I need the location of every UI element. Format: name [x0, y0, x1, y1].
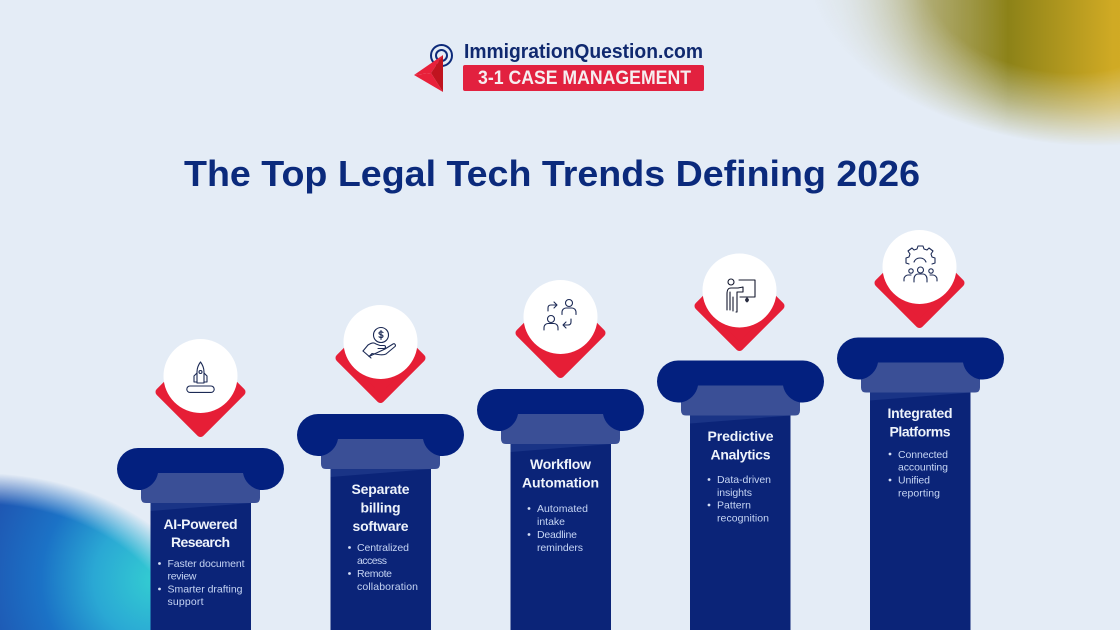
bullet list: access — [357, 555, 387, 567]
bullet list: Unified — [898, 474, 930, 486]
bullet list: Pattern — [717, 500, 751, 512]
bullet list: reminders — [537, 542, 583, 554]
bullet list — [889, 449, 948, 500]
bullet list: review — [168, 570, 197, 582]
icon circle — [164, 339, 238, 413]
pillar 4: Predictive Analytics — [657, 254, 824, 630]
heading — [522, 456, 599, 490]
decorative gold glow top right — [836, 0, 1120, 144]
bullet list: recognition — [717, 512, 769, 524]
heading: software — [352, 518, 409, 534]
bullet list: Connected — [898, 449, 948, 461]
heading: Predictive — [708, 428, 774, 444]
heading — [888, 405, 952, 440]
heading: Automation — [522, 474, 599, 490]
column shaft — [510, 444, 611, 630]
decorative blue glow bottom left — [0, 475, 150, 630]
icon: gear and team — [904, 246, 937, 282]
column capital — [477, 389, 644, 444]
column shaft — [150, 503, 251, 630]
icon: people exchange — [544, 300, 576, 330]
heading — [708, 428, 774, 462]
heading: AI-Powered — [164, 516, 238, 532]
heading: Platforms — [890, 424, 951, 440]
bullet list: collaboration — [357, 581, 418, 593]
logo banner: 3-1 CASE MANAGEMENT — [478, 68, 691, 89]
logo wordmark: ImmigrationQuestion.com — [464, 41, 703, 63]
red diamond badge — [698, 265, 780, 347]
icon circle — [524, 280, 598, 354]
icon circle — [344, 305, 418, 379]
pillar 5: Integrated Platforms — [837, 230, 1004, 630]
column capital — [297, 414, 464, 469]
heading: Integrated — [888, 405, 952, 421]
red diamond badge — [878, 242, 960, 324]
heading: billing — [360, 500, 400, 516]
pillar 3: Workflow Automation — [477, 280, 644, 630]
bullet list: intake — [537, 516, 565, 528]
red diamond badge — [160, 351, 242, 433]
heading: Workflow — [530, 456, 591, 472]
bullet list — [348, 542, 418, 593]
bullet list: Data-driven — [717, 474, 771, 486]
heading: Separate — [352, 481, 410, 497]
logo — [414, 41, 704, 92]
heading — [352, 481, 410, 534]
bullet list: Remote — [357, 568, 392, 580]
bullet list: Faster document — [168, 558, 245, 570]
bullet list: Automated — [537, 503, 588, 515]
bullet list — [158, 558, 245, 608]
bullet list: insights — [717, 487, 752, 499]
heading: Research — [171, 534, 230, 550]
bullet list: support — [168, 596, 204, 608]
pillar 2: Separate billing software — [297, 305, 464, 630]
column capital — [657, 360, 824, 416]
red diamond badge — [340, 317, 422, 399]
column capital — [117, 448, 284, 503]
column shaft — [690, 416, 790, 630]
bullet list — [708, 474, 771, 524]
bullet list: accounting — [898, 462, 948, 474]
icon: presenter with board — [727, 279, 755, 312]
column shaft — [870, 392, 970, 630]
bullet list: reporting — [898, 488, 940, 500]
icon: rocket — [187, 362, 214, 392]
red diamond badge — [520, 292, 602, 374]
pillar 1: AI-Powered Research — [117, 339, 284, 630]
bullet list: Smarter drafting — [168, 584, 243, 596]
icon circle — [702, 254, 776, 328]
column capital — [837, 338, 1004, 392]
heading: Analytics — [710, 446, 771, 462]
icon circle — [882, 230, 956, 304]
bullet list: Deadline — [537, 529, 577, 541]
logo icon: target and arrow — [414, 45, 452, 92]
heading — [164, 516, 238, 550]
icon: hand holding coin — [363, 328, 395, 358]
bullet list — [528, 503, 588, 554]
bullet list: Centralized — [357, 542, 409, 554]
column shaft — [330, 469, 431, 630]
title: The Top Legal Tech Trends Defining 2026 — [184, 153, 920, 194]
